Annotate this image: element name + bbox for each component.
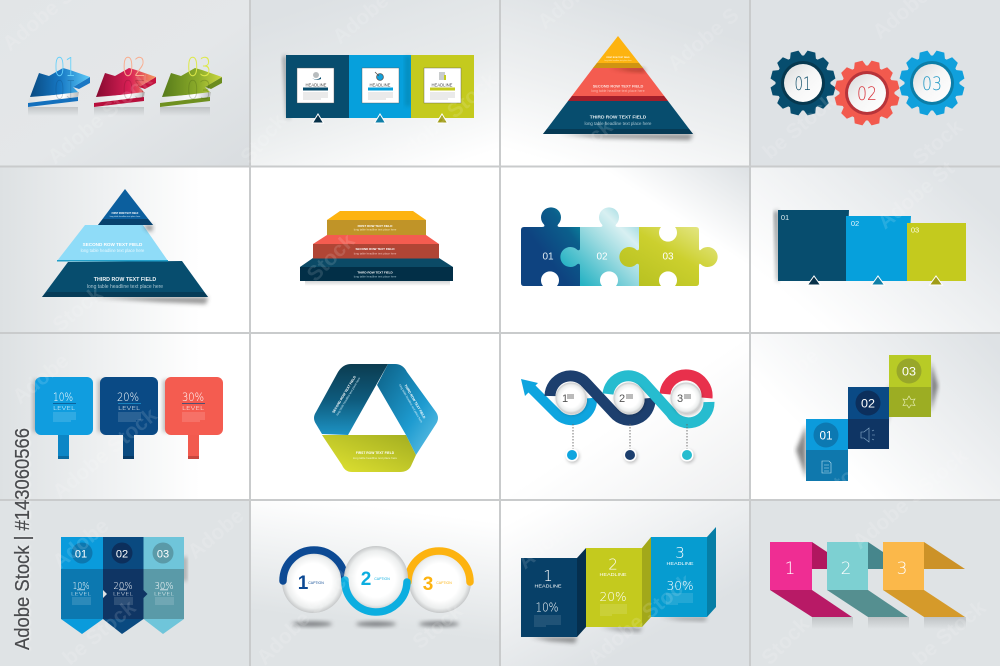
- column 02: [103, 537, 148, 634]
- card 30%: [163, 377, 223, 459]
- ribbon dark blue: SECOND ROW TEXT FIELD: [331, 375, 357, 414]
- panel: pyramid with shadows: [500, 0, 750, 166]
- node 2: [614, 382, 644, 462]
- pyramid third row: long table headline text place here: [585, 121, 652, 126]
- square 3 green: [411, 55, 474, 123]
- column 03: 30%: [154, 581, 174, 592]
- gear 02: [834, 60, 900, 126]
- panel: triangular ribbon: [250, 334, 500, 500]
- pyramid third row: THIRD ROW TEXT FIELD: [590, 114, 647, 120]
- watermarks: Stock: [236, 109, 291, 168]
- puzzle piece 02: 02: [596, 252, 608, 262]
- leaflet column 3: HEADLINE: [666, 561, 694, 566]
- watermarks: Stock: [48, 282, 107, 337]
- watermarks: Stock: [758, 282, 817, 337]
- arrow 01 blue: [28, 53, 90, 116]
- card 30%: LEVEL: [182, 406, 204, 412]
- column 01: 01: [75, 548, 87, 560]
- square 3 green: HEADLINE: [432, 82, 453, 88]
- panel: wave timeline: [500, 334, 750, 500]
- pyramid second row: [57, 225, 168, 262]
- arrow 03 green: 03: [186, 73, 212, 103]
- panel: stepped layers: [250, 167, 500, 333]
- panel: 3D arrows: [0, 0, 250, 166]
- panel: three stepped squares: [750, 167, 1000, 333]
- column 01: LEVEL: [71, 592, 92, 598]
- pyramid third row: THIRD ROW TEXT FIELD: [94, 277, 156, 283]
- pyramid second row: SECOND ROW TEXT FIELD: [83, 242, 143, 247]
- pyramid second row: long table headline text place here: [591, 89, 645, 93]
- watermarks: Adobe Stock: [388, 69, 502, 169]
- ribbon blue: THIRD ROW TEXT FIELD: [403, 384, 427, 420]
- step first row: long table headline text place here: [354, 228, 397, 232]
- panel: level cards: [0, 334, 250, 500]
- pyramid second row: SECOND ROW TEXT FIELD: [593, 84, 643, 88]
- puzzle piece 03: [619, 227, 718, 286]
- watermarks: Adobe: [513, 514, 578, 574]
- panel: ribbon squares 1 2 3: [750, 501, 1000, 666]
- card 10%: LEVEL: [53, 406, 75, 412]
- arrow wave ribbons: [521, 375, 709, 423]
- circle 1: CAPTION: [308, 581, 324, 585]
- step third row: [300, 258, 453, 281]
- leaflet column 1: HEADLINE: [534, 584, 562, 588]
- ribbon 1 pink: 1: [785, 559, 795, 579]
- circle 3: 3: [423, 574, 433, 595]
- leaflet column 1: [521, 548, 586, 637]
- arrow 03 green: [160, 53, 222, 116]
- ribbon blue: long table headline text place here: [398, 383, 424, 424]
- gear 03: 03: [922, 73, 942, 95]
- panel: three folded squares with cards: [250, 0, 500, 166]
- watermarks: Stock: [408, 599, 467, 654]
- card 30%: 30%: [182, 390, 204, 404]
- side credit text: Adobe Stock | #143060566: [12, 428, 34, 650]
- node 1: [556, 382, 586, 462]
- square 2 blue: HEADLINE: [370, 82, 391, 88]
- arrow 01 blue: 01: [54, 53, 76, 83]
- node 1: 1: [562, 393, 568, 405]
- square 1 navy: [286, 55, 349, 123]
- pyramid first row: [98, 189, 153, 232]
- column 03: 03: [157, 548, 169, 560]
- column 03: LEVEL: [154, 592, 175, 598]
- leaflet column 2: 2: [608, 556, 618, 574]
- ribbon 2 teal: [827, 542, 908, 617]
- watermarks: Adobe: [758, 344, 823, 404]
- circle 3: [408, 551, 471, 613]
- ribbon 1 pink: [770, 542, 852, 617]
- watermarks: be Stock: [758, 90, 841, 164]
- ribbon 3 yellow: [883, 542, 965, 617]
- pyramid third row: [42, 261, 208, 297]
- watermarks: Adobe St: [873, 157, 959, 234]
- column 02: 02: [116, 548, 128, 560]
- panel: stair cubes: [750, 334, 1000, 500]
- watermarks: Adobe Stock: [252, 229, 360, 337]
- column 02: 20%: [114, 581, 132, 592]
- circle 2: [344, 546, 408, 612]
- pyramid first row: long table headline text place here: [110, 215, 141, 218]
- node 3: 3: [677, 393, 683, 405]
- pyramid third row: long table headline text place here: [87, 284, 163, 290]
- pyramid third row: [543, 101, 693, 134]
- ribbon green: FIRST ROW TEXT FIELD: [356, 451, 395, 455]
- ribbon 3 yellow: 3: [897, 559, 907, 579]
- arrow 02 red: 02: [122, 73, 146, 103]
- column 03: [144, 537, 184, 634]
- column 02: LEVEL: [113, 592, 134, 598]
- arrow 03 green: 03: [186, 53, 212, 83]
- circle 1: 1: [298, 573, 309, 594]
- puzzle piece 01: 01: [542, 252, 554, 262]
- watermarks: Adobe: [168, 169, 233, 229]
- arrow 02 red: [94, 53, 156, 116]
- panel: arrow columns: [0, 501, 250, 666]
- cube 01: [806, 419, 848, 481]
- leaflet column 3: [651, 527, 716, 617]
- node 2: 2: [619, 393, 625, 405]
- ribbon 2 teal: 2: [841, 559, 851, 579]
- arrow 02 red: 02: [122, 53, 146, 83]
- pyramid first row: [593, 36, 643, 68]
- panel: folded leaflet: [500, 501, 750, 666]
- gear 01: 01: [794, 73, 812, 95]
- panel: puzzle pieces: [500, 167, 750, 333]
- watermarks: Stock: [913, 444, 972, 499]
- pyramid second row: long table headline text place here: [81, 248, 145, 253]
- square 02: 02: [851, 219, 859, 228]
- leaflet column 3: 3: [675, 544, 685, 562]
- pyramid first row: FIRST ROW TEXT FIELD: [606, 57, 630, 59]
- watermarks: Stock: [558, 115, 617, 170]
- step first row: FIRST ROW TEXT FIELD: [358, 224, 393, 228]
- column 01: [61, 537, 103, 634]
- square 01: 01: [781, 213, 789, 222]
- watermarks: Stock: [908, 115, 967, 170]
- step second row: [313, 235, 439, 258]
- watermarks: Adobe: [8, 349, 73, 409]
- panel: linked circles: [250, 501, 500, 666]
- cube 03: [889, 355, 931, 417]
- step third row: long table headline text place here: [354, 274, 397, 278]
- leaflet column 1: 10%: [536, 600, 558, 614]
- watermarks: Adobe: [48, 514, 113, 574]
- watermarks: Adobe S: [848, 481, 928, 554]
- pyramid first row: long table headline text place here: [604, 59, 632, 62]
- cube 01: 01: [820, 428, 833, 442]
- card 20%: 20%: [117, 390, 139, 404]
- puzzle piece 02: [560, 207, 639, 286]
- ribbon blue: [377, 364, 438, 455]
- circle 2: CAPTION: [374, 577, 390, 581]
- square 03: 03: [911, 226, 919, 234]
- ribbon green: [322, 435, 416, 472]
- ribbon dark blue: long table headline text place here: [335, 376, 361, 416]
- watermarks: Adobe Stock: [48, 404, 162, 504]
- watermarks: Stock: [818, 449, 877, 504]
- panel: separated pyramid: [0, 167, 250, 333]
- step third row: THIRD ROW TEXT FIELD: [357, 270, 393, 274]
- panel: gears: [750, 0, 1000, 166]
- cube 02: [848, 387, 889, 449]
- node 3: [670, 382, 702, 462]
- square 01: [778, 210, 849, 285]
- leaflet column 2: 20%: [600, 590, 626, 604]
- cube 03: 03: [902, 364, 916, 378]
- pyramid first row: FIRST ROW TEXT FIELD: [112, 213, 139, 215]
- square 1 navy: HEADLINE: [306, 82, 327, 88]
- square 2 blue: [349, 55, 411, 123]
- step second row: long table headline text place here: [354, 252, 397, 256]
- cube 02: 02: [861, 396, 875, 410]
- circle 3: CAPTION: [436, 581, 452, 585]
- leaflet column 2: [586, 537, 651, 627]
- circle 1: [282, 550, 345, 613]
- leaflet column 3: 30%: [666, 579, 694, 593]
- square 03: [907, 223, 966, 285]
- pyramid second row: [568, 68, 668, 101]
- gear 02: 02: [857, 83, 877, 105]
- step second row: SECOND ROW TEXT FIELD: [356, 247, 395, 251]
- column 01: 10%: [72, 581, 90, 592]
- leaflet column 2: HEADLINE: [600, 572, 626, 577]
- gear 01: [770, 50, 836, 116]
- puzzle piece 03: 03: [662, 252, 674, 262]
- gear 03: [899, 50, 965, 116]
- arrow 01 blue: 01: [54, 73, 76, 103]
- card 20%: LEVEL: [118, 406, 140, 412]
- ribbon dark blue: [314, 364, 388, 435]
- watermarks: Adobe: [183, 504, 248, 564]
- circle 2: 2: [361, 569, 371, 590]
- card 10%: 10%: [53, 390, 73, 404]
- square 02: [846, 216, 911, 285]
- card 20%: [98, 377, 158, 459]
- leaflet column 1: 1: [543, 567, 553, 585]
- step first row: [327, 211, 426, 235]
- puzzle piece 01: [521, 207, 580, 286]
- card 10%: [33, 377, 93, 459]
- ribbon green: long table headline text place here: [353, 456, 397, 460]
- watermarks: Adobe S: [663, 3, 743, 76]
- watermarks: Adobe Stock: [43, 69, 157, 169]
